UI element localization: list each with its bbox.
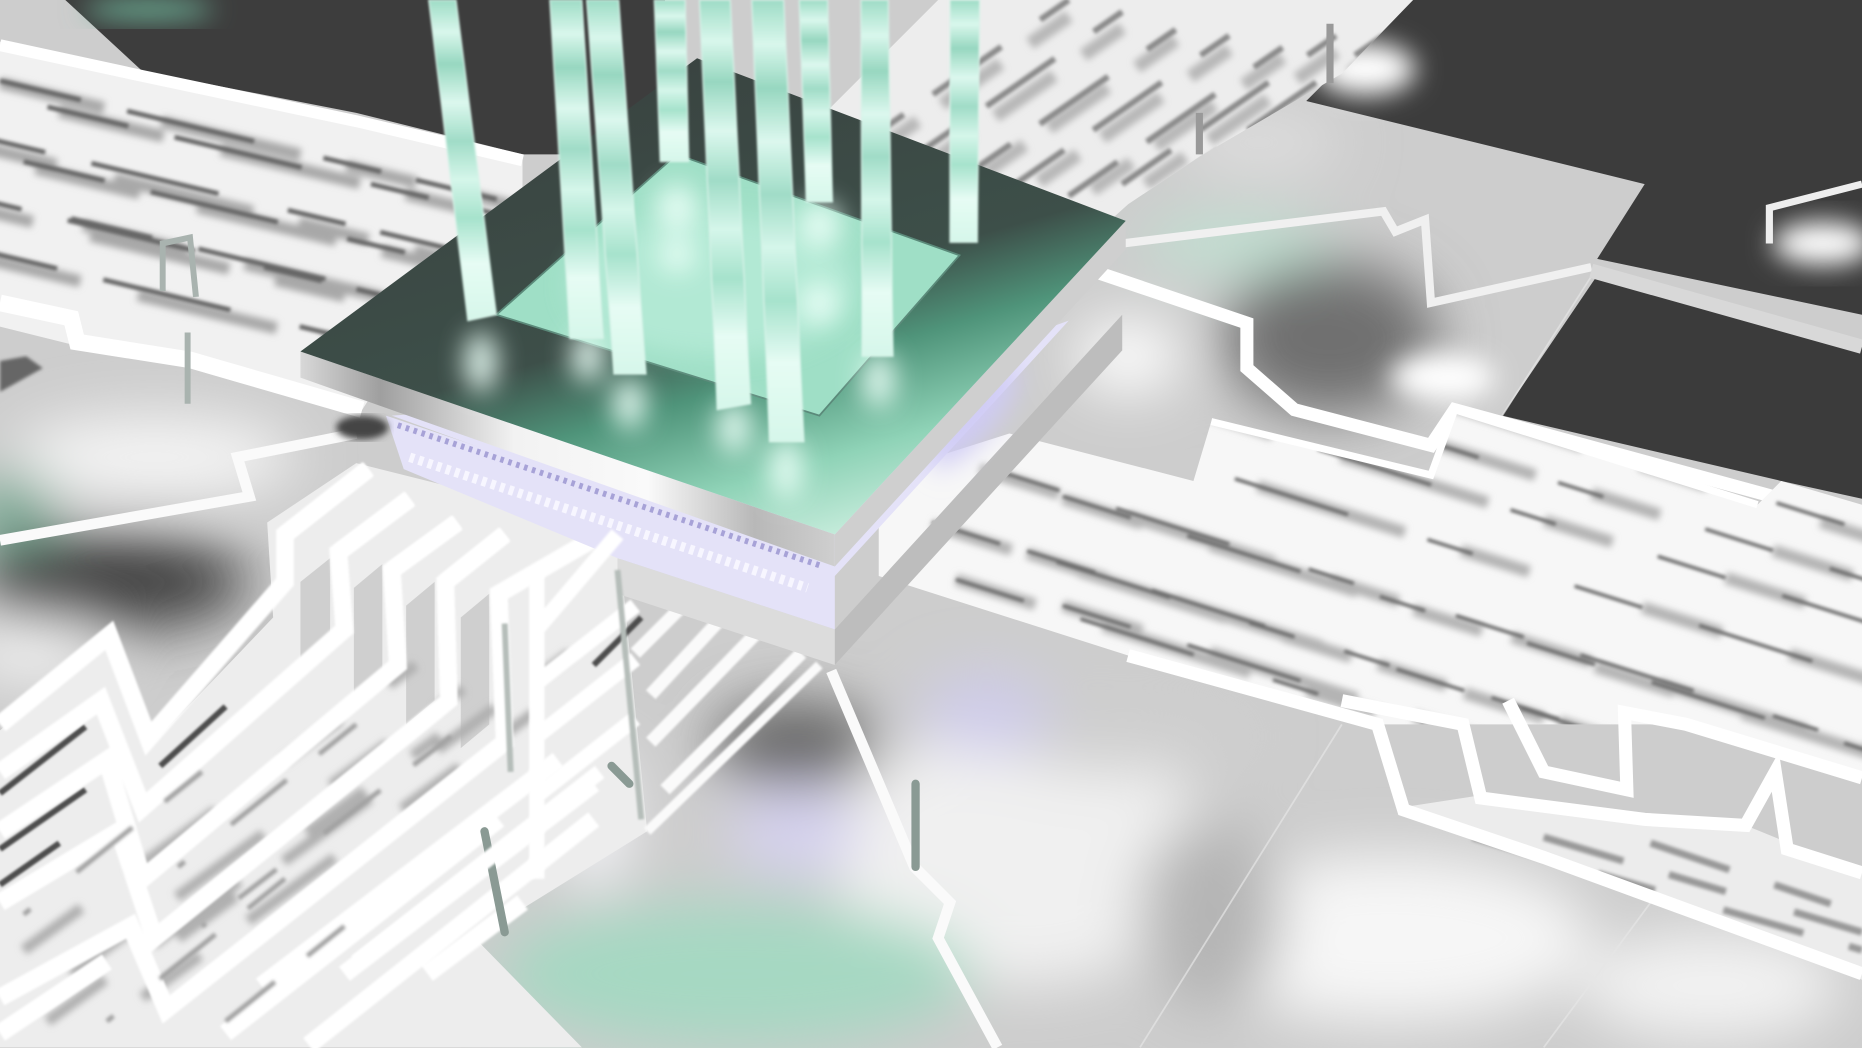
- white glow: far right: [1773, 222, 1862, 265]
- socket glow: [570, 214, 855, 356]
- front pillars: [429, 0, 496, 321]
- trace stubs: under chip: [635, 606, 819, 831]
- trace bundle: bottom left: [0, 463, 647, 1047]
- white reflection on right panel: [1391, 354, 1495, 401]
- glass fork over lilac band: [285, 469, 641, 962]
- lilac glow beneath chip: [386, 416, 835, 629]
- trace: left diagonal: [0, 433, 356, 540]
- streaks clipped to bundle: [889, 0, 1382, 200]
- trace bundle: lower right: [1128, 656, 1862, 980]
- white band along top edge: [0, 45, 522, 160]
- via pins: [484, 766, 916, 932]
- base plate under chip: [336, 315, 1122, 665]
- trace bundle: top left: [0, 40, 524, 418]
- zigzag traces: [0, 469, 612, 1045]
- grey panels: [300, 558, 489, 748]
- pillars reflections: [464, 184, 895, 500]
- chip top face: [300, 58, 1126, 534]
- streaks clipped to bundle: [0, 74, 512, 338]
- trace: right zigzag on board: [1092, 184, 1862, 523]
- white glow: top right: [1316, 43, 1416, 95]
- streaks clipped to bundle: [928, 414, 1862, 762]
- trace bundle: top right: [829, 0, 1437, 226]
- dark board tiles: [0, 0, 1862, 499]
- dark tile: right middle: [1502, 276, 1862, 499]
- dark tile: top left: [65, 0, 665, 154]
- soft grey streaks: [24, 653, 570, 1021]
- dark smudge beside chip: [336, 416, 388, 439]
- trace bundle: right: [878, 414, 1862, 771]
- grey streaks: [24, 724, 451, 1021]
- chip left edge: [300, 352, 835, 566]
- dark tile: left edge: [0, 356, 43, 392]
- trace: bottom center: [831, 671, 998, 1047]
- glass connector: left: [163, 238, 196, 404]
- chip: [300, 58, 1126, 566]
- green tint corner: [83, 0, 214, 19]
- chip right edge: [835, 221, 1126, 566]
- tile seams: [1140, 267, 1651, 1047]
- dark tile: top right: [1306, 0, 1862, 315]
- dark gaps: [0, 618, 641, 885]
- back pillars: [654, 0, 689, 162]
- glowing pillars: [429, 0, 980, 442]
- inner socket: [496, 154, 960, 416]
- white edge of bundle: [1211, 410, 1758, 505]
